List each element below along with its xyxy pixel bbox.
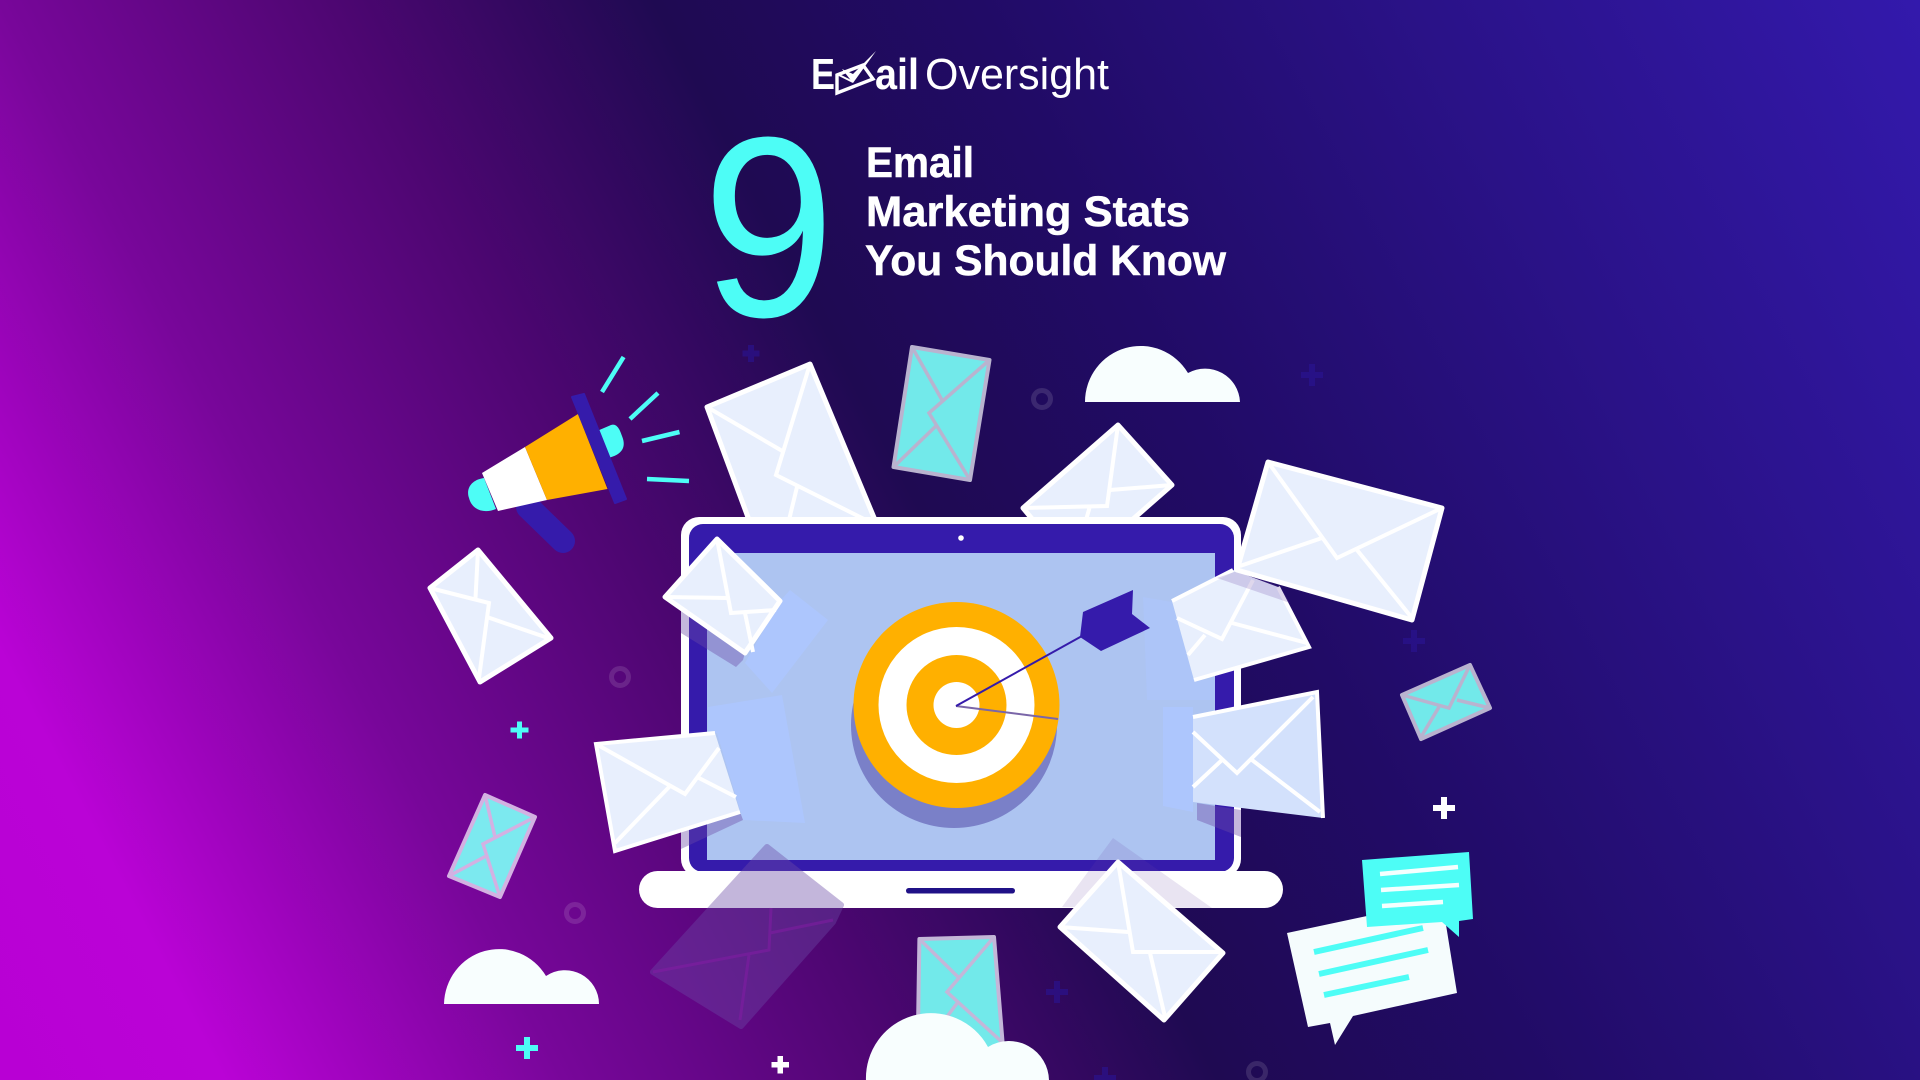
trackpad notch bbox=[906, 888, 1015, 894]
target bullseye bbox=[851, 602, 1060, 828]
title: Email Marketing Stats You Should Know: Marketing Stats bbox=[866, 188, 1190, 236]
cloud: bottom left bbox=[444, 949, 599, 1004]
megaphone cap bbox=[597, 425, 624, 458]
arrow in target bbox=[956, 590, 1150, 719]
megaphone orange horn bbox=[525, 414, 608, 500]
envelope: on laptop top-left bbox=[665, 539, 780, 653]
chat bubbles bbox=[1287, 852, 1473, 1045]
envelope: bottom centre right bbox=[1060, 862, 1223, 1020]
envelope: on laptop lower-left bbox=[596, 733, 740, 851]
envelope: far left bbox=[430, 550, 551, 682]
camera dot bbox=[958, 535, 964, 541]
cyan bubble lines bbox=[1380, 867, 1459, 906]
target shadow bbox=[851, 622, 1057, 828]
megaphone mouthpiece bbox=[468, 478, 496, 511]
envelope: cyan top bbox=[894, 347, 990, 480]
megaphone bbox=[468, 357, 689, 541]
title: Email Marketing Stats You Should Know bbox=[865, 139, 1227, 285]
big number 9: 9 bbox=[702, 84, 835, 371]
laptop bezel bbox=[689, 524, 1234, 872]
envelope: large top right bbox=[1237, 462, 1442, 620]
laptop lid bbox=[681, 517, 1241, 877]
logo: EmailOversight bbox=[811, 50, 1109, 99]
plus signs: bright bbox=[510, 722, 1455, 1074]
laptop base bbox=[639, 871, 1283, 908]
envelope: top centre behind laptop bbox=[1023, 425, 1172, 520]
logo: EmailOversight: E bbox=[811, 50, 835, 99]
envelope: faded, below laptop bbox=[653, 908, 833, 1020]
light panels on screen bbox=[708, 590, 1215, 823]
envelope: top left behind laptop bbox=[707, 364, 875, 520]
envelope shadow overlap bbox=[1217, 570, 1290, 603]
logo: EmailOversight: Oversight bbox=[925, 50, 1109, 99]
white speech bubble bbox=[1287, 900, 1457, 1045]
sound rays bbox=[602, 357, 689, 481]
white bubble lines bbox=[1314, 928, 1428, 995]
laptop bbox=[639, 517, 1283, 908]
megaphone handle bbox=[528, 507, 563, 541]
envelope: cyan bottom bbox=[918, 937, 1004, 1060]
title: Email Marketing Stats You Should Know: Email bbox=[866, 139, 974, 187]
cloud: top right bbox=[1085, 346, 1240, 402]
envelope: cyan right bbox=[1402, 665, 1490, 739]
logo: EmailOversight: ail bbox=[875, 50, 919, 99]
envelope: laptop right lower bbox=[1193, 692, 1323, 818]
laptop screen bbox=[707, 553, 1215, 860]
shadows from envelopes on laptop bbox=[653, 610, 1241, 1026]
megaphone front bar bbox=[572, 394, 626, 503]
envelope: cyan lower left bbox=[449, 795, 535, 897]
icon: envelope with check mark bbox=[837, 51, 876, 93]
megaphone white band bbox=[482, 447, 547, 511]
cyan speech bubble bbox=[1362, 852, 1473, 937]
cloud: bottom centre bbox=[866, 1013, 1049, 1080]
title: Email Marketing Stats You Should Know: You Should Know bbox=[865, 237, 1227, 285]
background decorations: faint plus signs and rings bbox=[566, 345, 1425, 1080]
envelope: on laptop right middle bbox=[1172, 570, 1310, 680]
